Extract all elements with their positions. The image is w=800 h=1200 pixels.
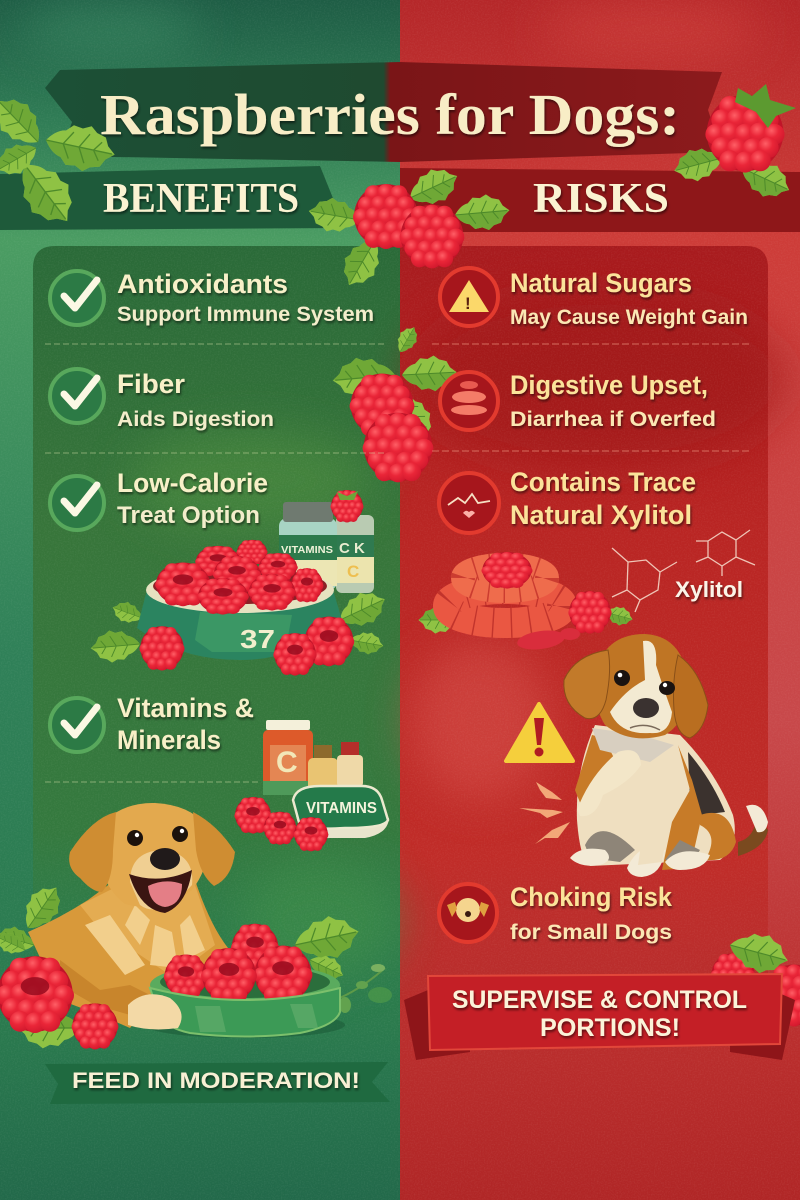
- text: vitamins: [117, 693, 254, 755]
- vitamins jars and bowl: C: [276, 746, 298, 779]
- benefit: fiber: [50, 369, 274, 431]
- irritated intestine with raspberries: [418, 552, 635, 652]
- risk: choking: [439, 882, 673, 944]
- text: xylitol: Contains Trace: [510, 467, 696, 497]
- text: fiber: Fiber: [117, 369, 186, 399]
- text: antioxidants: Support Immune System: [117, 303, 374, 326]
- text: choking: for Small Dogs: [510, 921, 672, 944]
- text: low-calorie: Treat Option: [117, 502, 260, 529]
- leaves: top left: [0, 88, 119, 235]
- text: sugars: May Cause Weight Gain: [510, 306, 748, 329]
- banner: feed in moderation: [45, 1062, 390, 1104]
- text: antioxidants: Antioxidants: [117, 269, 288, 299]
- raspberries: centre top: [306, 161, 511, 294]
- banner: supervise and control: PORTIONS!: [540, 1014, 680, 1042]
- vitamin bottles: upper: C: [347, 562, 359, 581]
- paws: [570, 847, 710, 877]
- icon: check: [50, 271, 104, 325]
- icon: check: [50, 476, 104, 530]
- risk: digestive upset: [440, 370, 716, 431]
- raspberry: top right: [670, 84, 796, 205]
- number on bowl: 37: [240, 624, 275, 654]
- text: fiber: [117, 369, 274, 431]
- icon: check: [50, 369, 104, 423]
- icon: warning: !: [465, 294, 471, 313]
- raspberries: centre middle: [331, 323, 457, 482]
- text: xylitol: Natural Xylitol: [510, 500, 692, 530]
- text: low-calorie: Low-Calorie: [117, 468, 268, 498]
- icon: check: [50, 698, 104, 752]
- vitamin bottles: upper: C K: [339, 540, 365, 557]
- benefit: antioxidants: [50, 269, 374, 326]
- text: digestive: Digestive Upset,: [510, 370, 708, 400]
- text: digestive: [510, 370, 716, 431]
- icon: warning: [440, 268, 498, 326]
- vitamins jars and bowl: [234, 720, 389, 851]
- vitamin bottles: upper: [279, 490, 374, 593]
- band: benefits heading: [0, 166, 345, 230]
- text: fiber: Aids Digestion: [117, 408, 274, 431]
- text: choking: Choking Risk: [510, 882, 673, 912]
- panel: risks: [400, 246, 768, 1060]
- label: xylitol: Xylitol: [675, 577, 743, 602]
- title: Raspberries for Dogs:: [100, 82, 680, 147]
- heading: benefits: BENEFITS: [103, 176, 299, 222]
- title banner: [45, 62, 722, 162]
- warning triangle: [506, 704, 573, 761]
- band: risks heading: [400, 168, 800, 232]
- text: low-calorie: [117, 468, 268, 529]
- risk: natural sugars: [440, 268, 748, 329]
- banner: supervise and control: SUPERVISE & CONTROL: [452, 986, 747, 1014]
- tail: [738, 815, 768, 856]
- text: choking: [510, 882, 673, 944]
- text: vitamins: Vitamins &: [117, 693, 254, 723]
- risk: xylitol: [439, 467, 696, 533]
- banner: supervise and control: [404, 974, 795, 1060]
- body: [577, 725, 735, 866]
- raised paw: [577, 750, 641, 816]
- background: red half: [400, 0, 800, 1200]
- text: vitamins: Minerals: [117, 725, 221, 755]
- text: digestive: Diarrhea if Overfed: [510, 408, 716, 431]
- golden retriever: [0, 803, 235, 1028]
- benefit: low-calorie: [50, 468, 268, 530]
- bowl of raspberries: [145, 911, 392, 1038]
- text: antioxidants: [117, 269, 374, 326]
- text: sugars: [510, 268, 748, 329]
- vitamins jars and bowl: VITAMINS: [306, 800, 377, 817]
- icon: intestine: [440, 372, 498, 430]
- beagle head: [564, 634, 708, 738]
- loose raspberries: [140, 617, 354, 676]
- xylitol molecule diagram: [612, 530, 755, 612]
- pain sparks: [519, 782, 570, 844]
- vitamin bottles: upper: VITAMINS: [281, 545, 333, 556]
- raspberries: bottom right: [710, 926, 800, 1026]
- dog head: [69, 803, 235, 913]
- raspberries: bottom left: [0, 928, 118, 1049]
- banner: feed in moderation: FEED IN MODERATION!: [72, 1068, 360, 1093]
- beagle puppy: [564, 634, 768, 877]
- dog paw: [128, 994, 182, 1029]
- text: xylitol: [510, 467, 696, 530]
- bowl of raspberries with number 37: [89, 540, 392, 676]
- heading: risks: RISKS: [533, 176, 669, 222]
- text: sugars: Natural Sugars: [510, 268, 692, 298]
- icon: molecule: [439, 473, 499, 533]
- panel: benefits: [33, 246, 400, 1060]
- background: green half: [0, 0, 400, 1200]
- icon: dog face: [439, 884, 497, 942]
- benefit: vitamins and minerals: [50, 693, 254, 755]
